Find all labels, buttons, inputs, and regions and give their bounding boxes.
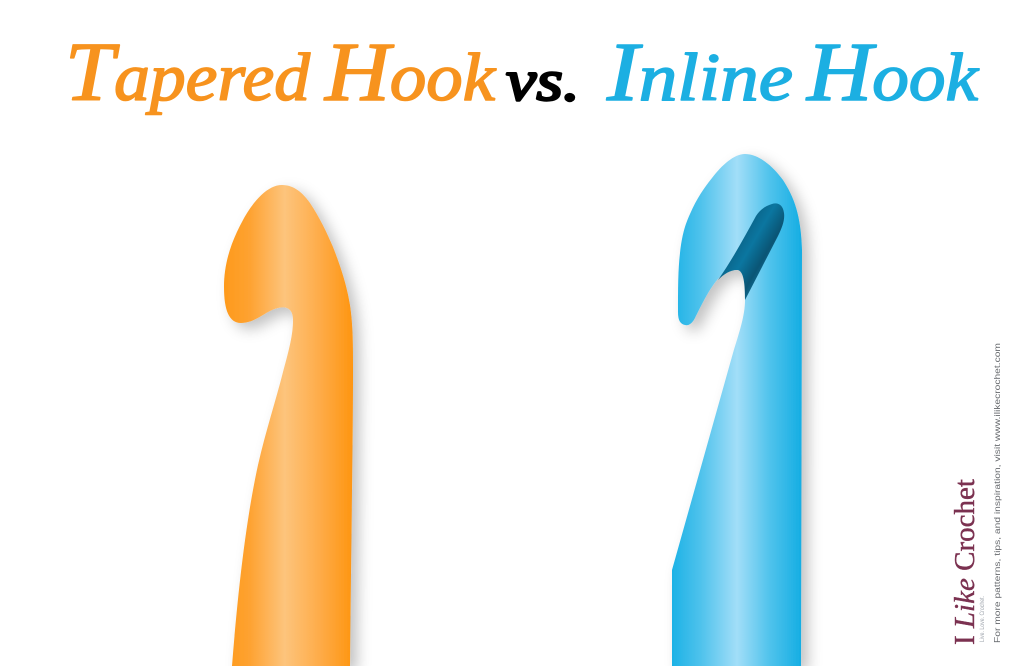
title: tapered hook: Hook (324, 26, 497, 119)
title: inline hook: Hook (806, 26, 980, 119)
title: tapered hook (65, 26, 497, 119)
title (65, 26, 980, 119)
title: tapered hook: Tapered (65, 26, 311, 119)
tapered crochet hook (224, 185, 353, 666)
brand name: I Like Crochet (949, 479, 981, 645)
tagline: Live. Love. Crochet. (979, 596, 986, 642)
title: vs.: vs. (506, 48, 580, 113)
website note: For more patterns, tips, and inspiration, visit www.ilikecrochet.com (992, 343, 1002, 643)
hook slot (718, 203, 784, 300)
title: inline hook (606, 26, 980, 119)
logo: I Like Crochet (949, 479, 986, 645)
hook body (672, 154, 802, 666)
inline crochet hook (672, 154, 802, 666)
title: inline hook: Inline (606, 26, 793, 119)
